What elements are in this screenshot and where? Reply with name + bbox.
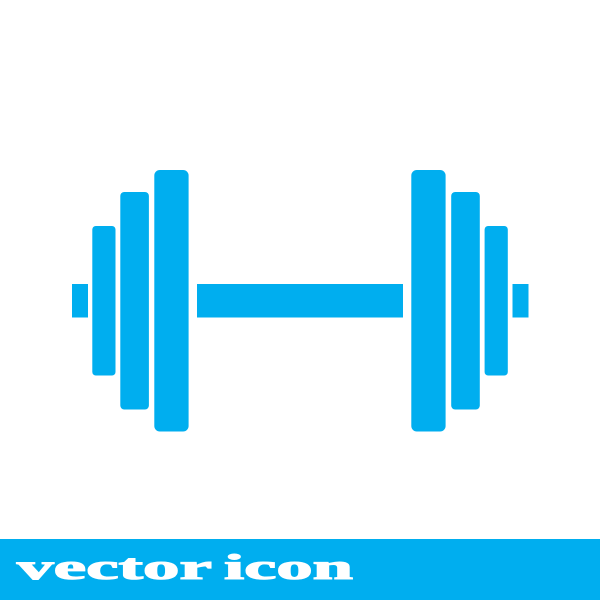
banner text — [17, 547, 353, 587]
left small plate — [92, 226, 116, 376]
left large plate — [154, 170, 189, 432]
icon: dumbbell — [72, 170, 528, 432]
left medium plate — [120, 192, 149, 410]
right small plate — [485, 226, 508, 376]
handle bar — [197, 284, 403, 318]
word: icon: icon — [224, 547, 353, 587]
right collar — [512, 284, 528, 318]
banner background — [0, 539, 600, 600]
right medium plate — [451, 192, 480, 410]
word: vector: vector — [17, 547, 212, 587]
right large plate — [411, 170, 446, 432]
left collar — [72, 284, 88, 318]
footer banner — [0, 539, 600, 600]
